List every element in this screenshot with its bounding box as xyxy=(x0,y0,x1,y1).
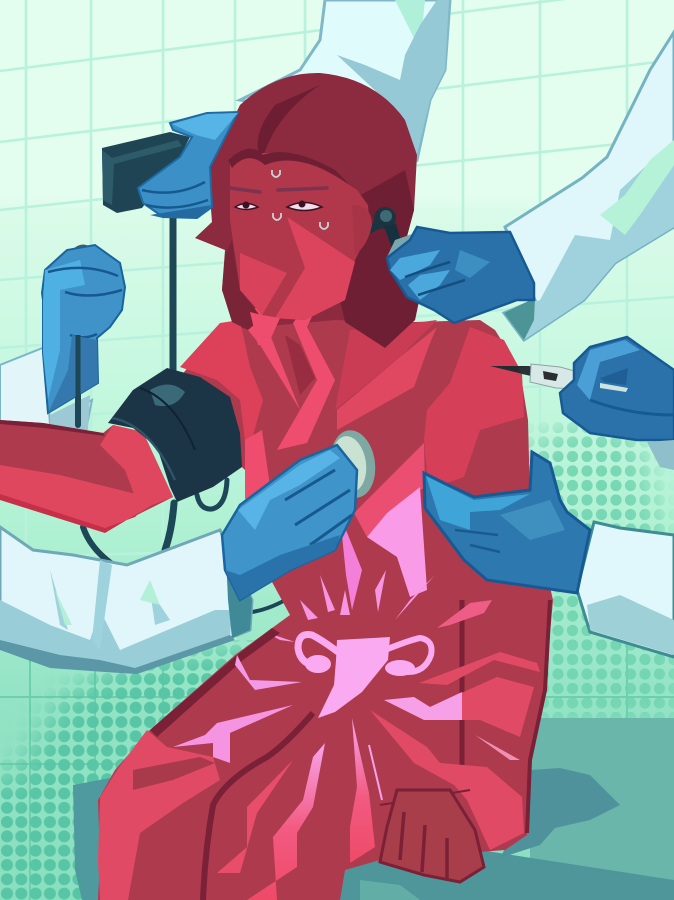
otoscope xyxy=(365,207,421,259)
glove: hand with syringe xyxy=(560,337,674,440)
thigh crease xyxy=(203,713,313,900)
thigh bright xyxy=(98,730,220,900)
sleeve: top arm xyxy=(240,0,450,160)
chest bright bar xyxy=(354,443,425,537)
chest streaks xyxy=(248,300,335,450)
hip crease xyxy=(380,790,470,805)
device: sphygmomanometer xyxy=(102,132,190,213)
icon: uterus xyxy=(298,635,432,718)
sleeve: upper right arm xyxy=(504,32,674,340)
face xyxy=(228,149,372,345)
tube: sphygmomanometer hose xyxy=(78,215,337,612)
chest bright left xyxy=(180,320,263,457)
halftone dots: right xyxy=(520,420,674,720)
glove: hand holding bulb xyxy=(42,244,125,413)
sleeve: upper left arm xyxy=(0,347,92,430)
stethoscope chest piece xyxy=(326,427,380,501)
sleeve: lower right arm xyxy=(577,522,674,657)
body outline right xyxy=(527,600,550,833)
thigh dark seam xyxy=(150,655,243,737)
eyes xyxy=(235,204,258,210)
ear xyxy=(352,205,372,255)
sleeve: syringe arm xyxy=(647,440,674,470)
eyebrows xyxy=(230,188,327,192)
body: torso and legs xyxy=(98,300,553,900)
sweat drops xyxy=(272,170,328,229)
examination bench xyxy=(73,718,674,900)
hair: front over shoulder xyxy=(340,170,425,348)
glove: hand gripping arm xyxy=(424,452,590,593)
syringe xyxy=(490,364,627,392)
halftone dots: lower left xyxy=(1,640,254,900)
sleeve: lower left arm xyxy=(0,527,252,674)
hairline xyxy=(228,149,360,195)
glove: hand with otoscope xyxy=(387,227,534,323)
hair: left strand over shoulder xyxy=(222,240,262,330)
left arm xyxy=(0,420,173,533)
glove: hand on device xyxy=(138,112,238,218)
fist xyxy=(380,790,484,882)
vertical seam xyxy=(460,600,464,770)
blood pressure cuff xyxy=(108,368,242,502)
right shoulder bright xyxy=(424,327,524,483)
bulb tube overlay xyxy=(76,335,80,398)
face shading chevrons xyxy=(275,217,355,320)
glove: hand with stethoscope xyxy=(222,445,357,600)
pink zaps on belly xyxy=(367,487,427,597)
right leg bands xyxy=(384,677,534,737)
hair: back xyxy=(195,73,425,348)
